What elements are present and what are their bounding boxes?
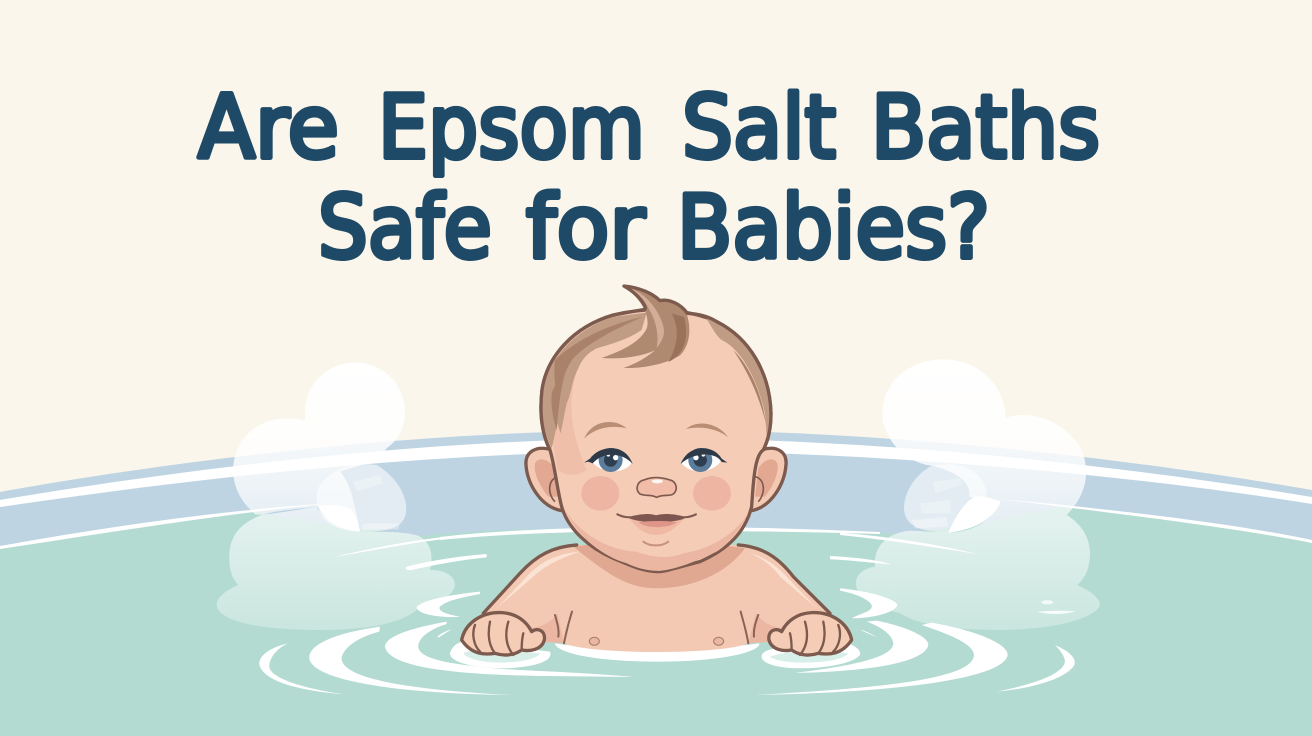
right eye xyxy=(681,448,727,472)
hand ripples xyxy=(450,641,860,668)
right hair band xyxy=(705,317,770,443)
steam highlights xyxy=(318,475,400,532)
chin shading xyxy=(565,510,748,571)
title: Salt xyxy=(682,76,836,178)
title: Baths xyxy=(871,76,1100,178)
water ripples left xyxy=(259,533,633,695)
face side shadow xyxy=(547,370,587,475)
right ear xyxy=(740,448,786,511)
arm creases and armpits xyxy=(555,612,758,643)
left eye xyxy=(584,448,633,472)
nose xyxy=(637,477,676,497)
steam cloud right xyxy=(856,359,1100,630)
hair tuft xyxy=(602,286,689,368)
tub back wall xyxy=(0,430,1312,620)
shoulder outline xyxy=(483,545,830,613)
title: Are xyxy=(198,76,339,178)
water edge lines xyxy=(0,499,1312,549)
eyebrows xyxy=(584,422,728,438)
mouth xyxy=(617,514,696,545)
steam cloud left xyxy=(217,363,455,630)
shoulder highlights xyxy=(497,552,817,608)
left ear xyxy=(526,448,573,511)
tub rim highlight xyxy=(0,438,1312,507)
right hand xyxy=(769,613,852,655)
head xyxy=(541,310,771,572)
torso xyxy=(483,545,830,652)
water xyxy=(0,507,1312,736)
title: Babies? xyxy=(677,176,990,278)
hair xyxy=(541,286,771,450)
arm shading xyxy=(530,613,783,643)
title: for xyxy=(526,176,645,278)
water ripples right xyxy=(757,533,1075,695)
title xyxy=(198,76,1100,278)
hair streaks xyxy=(554,317,643,400)
title: Epsom xyxy=(378,76,645,178)
baby xyxy=(450,286,860,668)
left hand xyxy=(462,613,544,655)
head outline over hair xyxy=(541,286,771,450)
nipples xyxy=(589,637,724,645)
neck shadow xyxy=(573,543,745,588)
cheeks xyxy=(581,476,731,511)
bathtub xyxy=(0,430,1312,736)
left hair band xyxy=(542,313,647,448)
torso band ripple xyxy=(555,643,759,662)
title: Safe xyxy=(318,176,492,278)
steam highlights xyxy=(912,478,1076,614)
